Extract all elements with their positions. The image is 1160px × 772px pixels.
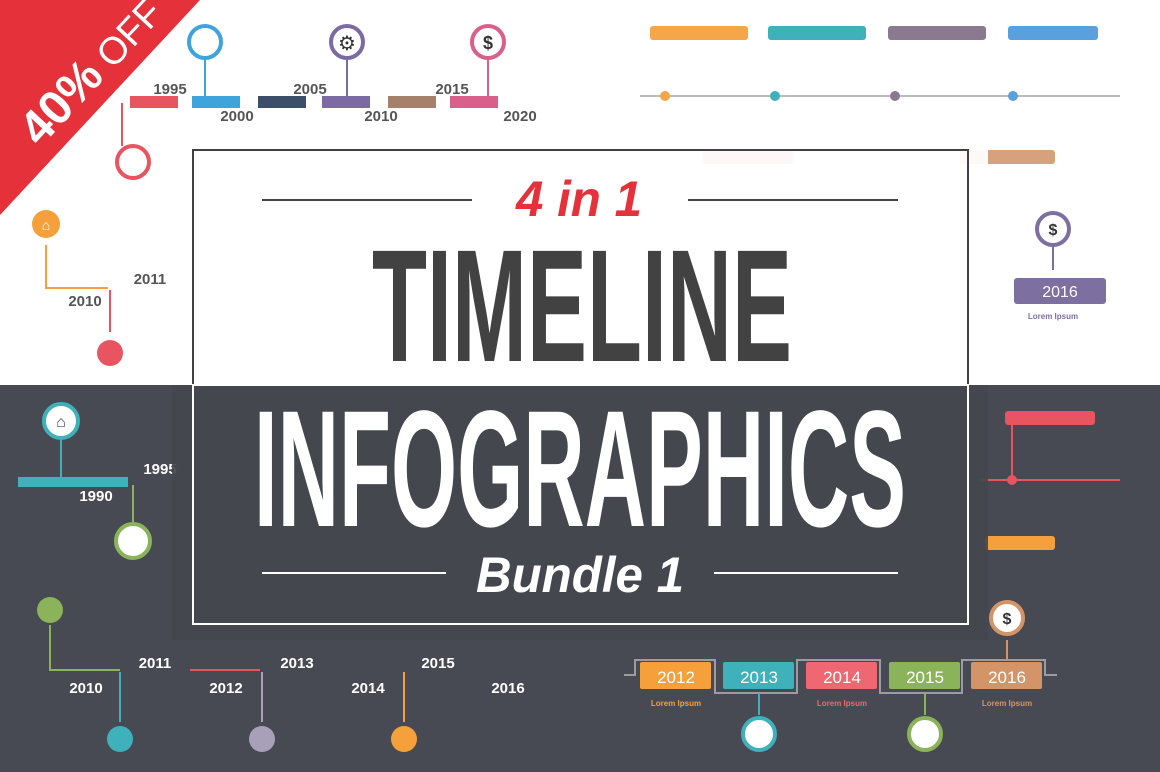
timeline: dark bottom-right colored boxes: 2012 [657,668,695,687]
timeline: dark bottom-left [37,597,525,752]
timeline: top-left arrows: 2020 [503,108,537,125]
timeline: dark bottom-left: 2015 [421,655,455,672]
timeline: top-right [640,26,1120,164]
timeline: dark bottom-left: 2012 [209,680,243,697]
timeline: dark bottom-left: 2010 [69,680,103,697]
timeline: dark bottom-right colored boxes: Lorem Ipsum [651,699,701,708]
subtitle: 4 in 1: 4 in 1 [515,171,642,227]
timeline: top-left arrows: 2005 [293,81,327,98]
timeline: dark bottom-right colored boxes: 2014 [823,668,861,687]
title: TIMELINE: TIMELINE [372,216,792,395]
timeline: dark bottom-right colored boxes: Lorem Ipsum [982,699,1032,708]
timeline: top-left arrows: 2015 [435,81,469,98]
timeline: top-left arrows: ⚙ [338,33,356,55]
timeline: top-left arrows: 2010 [364,108,398,125]
timeline: middle-right: 2016 [1042,284,1078,301]
timeline: middle-left orange [32,210,166,366]
timeline: dark bottom-right colored boxes: $ [1003,611,1012,628]
timeline: dark bottom-left: 2014 [351,680,385,697]
timeline: middle-left orange: ⌂ [42,217,50,233]
timeline: dark bottom-left: 2011 [139,655,171,672]
badge: 40% OFF ribbon [0,0,200,215]
timeline: middle-left orange: 2011 [134,271,166,288]
timeline: dark bottom-right colored boxes [624,602,1057,750]
timeline: top-left arrows: 1995 [153,81,187,98]
timeline: middle-right [1014,213,1106,321]
timeline: dark left top: 1990 [79,488,113,505]
background: dark bottom half [0,385,1160,772]
timeline: dark bottom-right colored boxes: Lorem Ipsum [817,699,867,708]
subtitle: Bundle 1: Bundle 1 [476,547,684,603]
timeline: dark left top [18,404,177,558]
timeline: dark bottom-right colored boxes: 2016 [988,668,1026,687]
timeline: middle-right: $ [1049,222,1058,239]
timeline: dark bottom-left: 2013 [280,655,314,672]
timeline: middle-left orange: 2010 [68,293,102,310]
timeline: top-left arrows: $ [483,33,493,53]
timeline: dark left top: 1995 [143,461,177,478]
timeline: dark right top [980,411,1120,550]
timeline: dark bottom-right colored boxes: 2013 [740,668,778,687]
background: white top half [0,0,1160,385]
timeline: dark left top: ⌂ [56,414,66,431]
timeline: dark bottom-right colored boxes: 2015 [906,668,944,687]
timeline: top-left arrows [117,26,537,178]
timeline: top-left arrows: 2000 [220,108,254,125]
timeline: dark bottom-left: 2016 [491,680,525,697]
timeline: middle-right: Lorem Ipsum [1028,312,1078,321]
center card [172,130,988,640]
